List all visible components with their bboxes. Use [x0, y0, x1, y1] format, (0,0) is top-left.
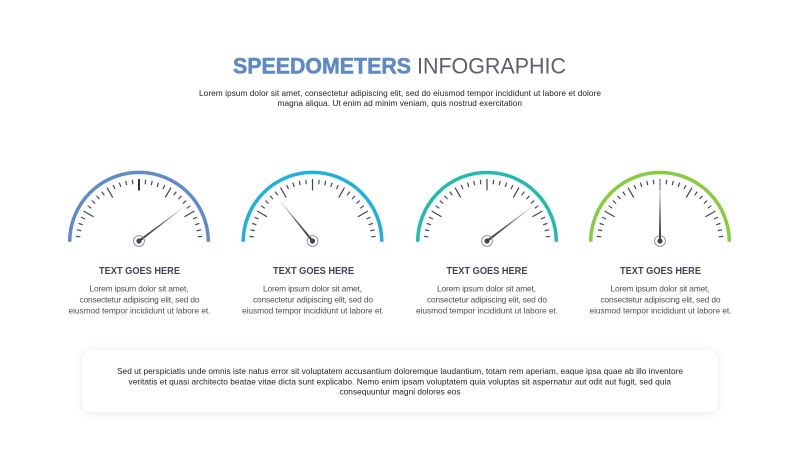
note text: consequuntur magni dolores eos	[340, 386, 460, 396]
gauge arc 4	[591, 172, 729, 242]
description 2	[242, 284, 384, 315]
panel: speedometer 1	[68, 172, 210, 315]
gauge ticks 2	[249, 179, 376, 237]
description 4: eiusmod tempor incididunt ut labore et.	[590, 305, 732, 315]
subtitle text: Lorem ipsum dolor sit amet, consectetur adipiscing elit, sed do eiusmod tempor incididunt ut labore et dolore	[199, 88, 601, 98]
title	[233, 53, 566, 78]
description 4	[590, 284, 732, 315]
heavy top tick 1	[138, 179, 140, 190]
description 2: eiusmod tempor incididunt ut labore et.	[242, 305, 384, 315]
title: SPEEDOMETERS	[233, 53, 411, 78]
gauge arc 2	[243, 172, 382, 242]
needle 2	[279, 200, 313, 242]
description 2: consectetur adipiscing elit, sed do	[253, 295, 373, 305]
needle 1	[138, 206, 186, 242]
description 1: consectetur adipiscing elit, sed do	[80, 295, 200, 305]
note text	[117, 366, 683, 396]
description 3	[416, 284, 558, 315]
panel: speedometer 4	[590, 172, 732, 315]
description 1: Lorem ipsum dolor sit amet,	[90, 284, 188, 294]
needle hub 4	[655, 236, 665, 246]
heading 4: TEXT GOES HERE	[620, 265, 701, 277]
needle hub 2	[307, 236, 318, 246]
panel: speedometer 3	[416, 172, 558, 315]
needle 4	[659, 179, 661, 241]
description 3: eiusmod tempor incididunt ut labore et.	[416, 305, 558, 315]
gauge arc 1	[70, 172, 208, 242]
gauge ticks 1	[76, 179, 202, 237]
heading 3: TEXT GOES HERE	[446, 265, 528, 277]
gauge ticks 3	[424, 179, 550, 237]
needle hub 1	[134, 236, 144, 246]
heading 1: TEXT GOES HERE	[99, 265, 180, 277]
description 2: Lorem ipsum dolor sit amet,	[263, 284, 362, 294]
description 1: eiusmod tempor incididunt ut labore et.	[68, 305, 210, 315]
description 1	[68, 284, 210, 315]
gauge ticks 4	[597, 179, 723, 237]
note text: Sed ut perspiciatis unde omnis iste natus error sit voluptatem accusantium doloremque laudantium, totam rem aperiam, eaque ipsa quae ab illo inventore	[117, 366, 683, 376]
panel: bottom note	[82, 350, 718, 412]
description 3: Lorem ipsum dolor sit amet,	[437, 284, 536, 294]
title: INFOGRAPHIC	[417, 53, 566, 78]
needle hub 3	[482, 236, 492, 246]
needle 3	[486, 206, 533, 242]
panel: speedometer 2	[242, 172, 384, 315]
heading 2: TEXT GOES HERE	[273, 265, 354, 277]
subtitle text	[199, 88, 601, 108]
description 4: Lorem ipsum dolor sit amet,	[610, 284, 710, 294]
subtitle text: magna aliqua. Ut enim ad minim veniam, quis nostrud exercitation	[278, 98, 522, 108]
description 3: consectetur adipiscing elit, sed do	[427, 295, 547, 305]
note text: veritatis et quasi architecto beatae vitae dicta sunt explicabo. Nemo enim ipsam voluptatem quia voluptas sit aspernatur aut odit aut fugit, sed quia	[128, 376, 671, 386]
note card	[82, 350, 718, 412]
gauge arc 3	[418, 172, 556, 242]
description 4: consectetur adipiscing elit, sed do	[600, 295, 721, 305]
